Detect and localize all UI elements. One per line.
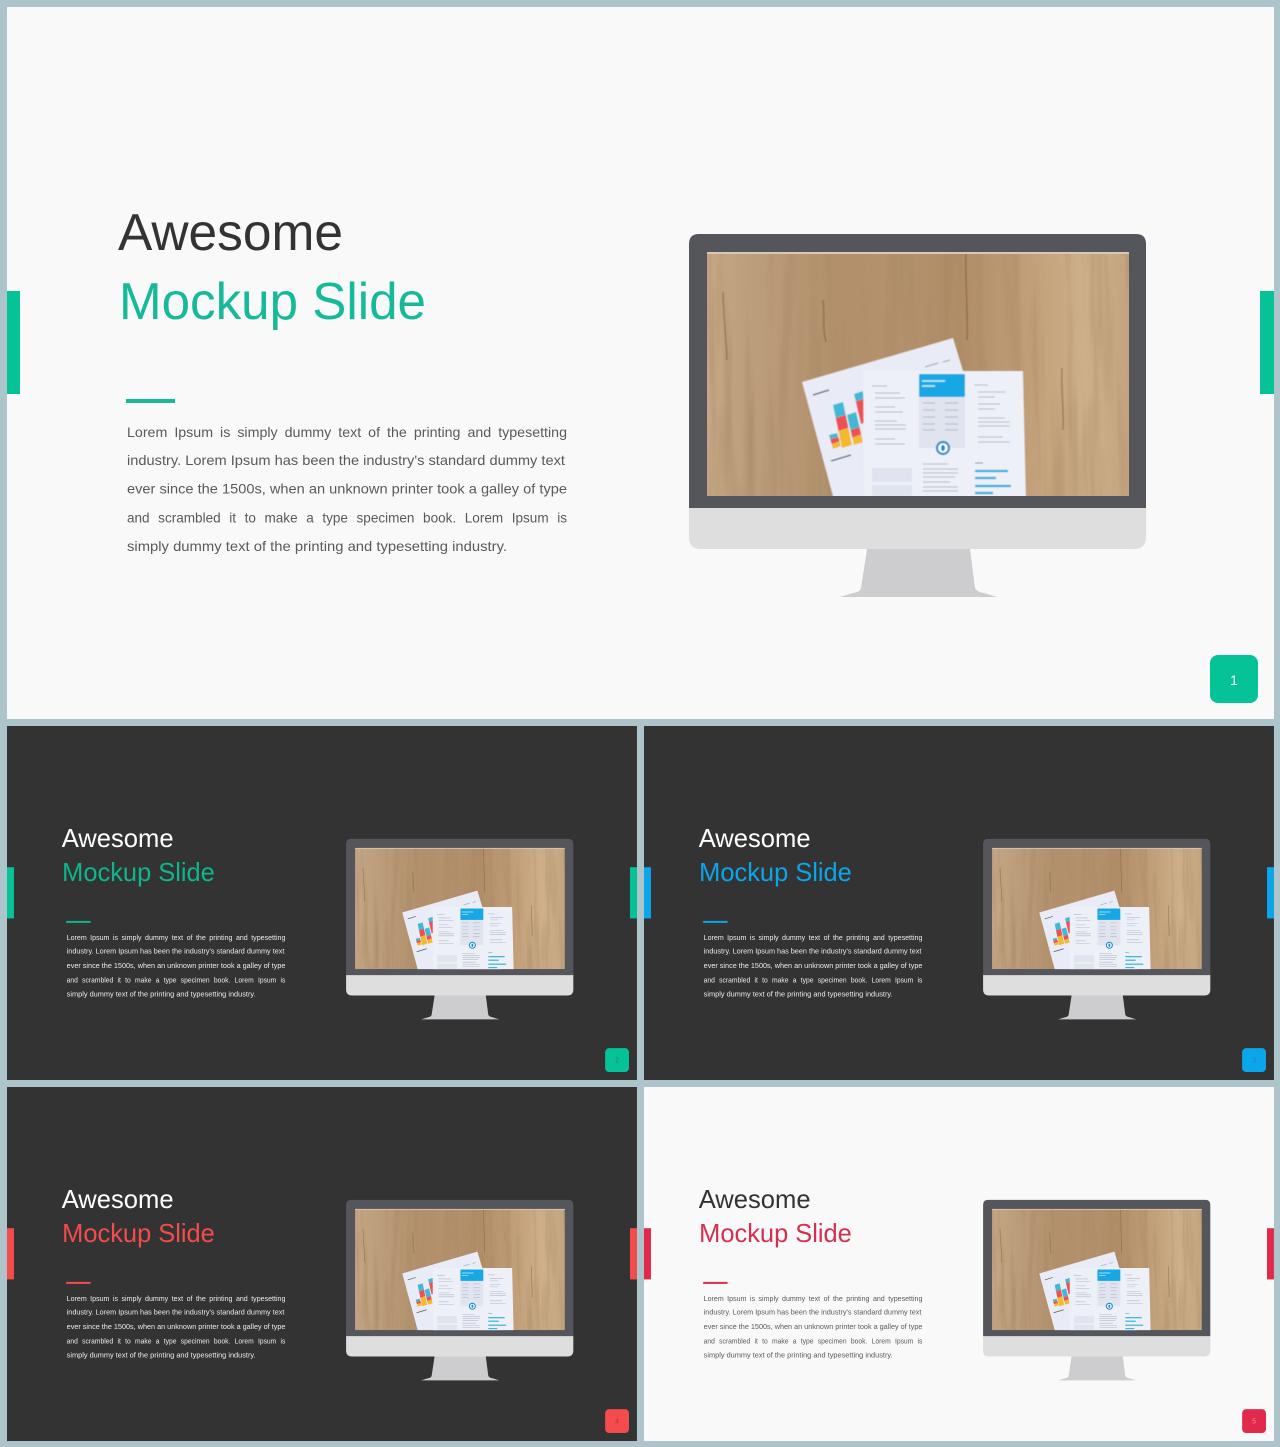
accent divider: [66, 1282, 91, 1284]
heading: [699, 1186, 852, 1248]
body text: industry. Lorem Ipsum has been the industry's standard dummy text: [67, 949, 284, 956]
body text: industry. Lorem Ipsum has been the industry's standard dummy text: [67, 1310, 284, 1317]
body text: Lorem Ipsum is simply dummy text of the printing and typesetting: [704, 935, 923, 942]
blue header block: [919, 374, 965, 397]
page number badge: [1242, 1048, 1266, 1072]
accent divider: [126, 399, 175, 403]
heading: [62, 1186, 215, 1248]
left accent tab: [644, 1228, 651, 1279]
right accent tab: [630, 867, 637, 918]
body text: [67, 1296, 286, 1359]
page number badge: 5: [1252, 1419, 1256, 1426]
body text: ever since the 1500s, when an unknown printer took a galley of type: [704, 963, 923, 970]
monitor mockup: [983, 1200, 1210, 1380]
heading: [699, 825, 852, 887]
panel: main light slide: [7, 7, 1274, 719]
body text: simply dummy text of the printing and typesetting industry.: [67, 991, 256, 998]
body text: [67, 935, 286, 998]
monitor stand: [840, 549, 997, 597]
body text: industry. Lorem Ipsum has been the industry's standard dummy text: [704, 1310, 921, 1317]
panel: dark slide red: [7, 1087, 637, 1441]
panel: dark slide blue: [644, 726, 1274, 1080]
heading: Mockup Slide: [699, 859, 852, 887]
right accent tab: [1260, 291, 1274, 394]
page number badge: 4: [615, 1419, 619, 1426]
panel: light slide crimson: [644, 1087, 1274, 1441]
page number badge: [605, 1409, 629, 1433]
body text: [704, 1296, 923, 1359]
slide background: [644, 1087, 1274, 1441]
body text: ever since the 1500s, when an unknown printer took a galley of type: [704, 1324, 923, 1331]
monitor mockup: [346, 839, 573, 1019]
monitor bezel: [689, 234, 1146, 508]
page number badge: 3: [1252, 1058, 1256, 1065]
heading: Mockup Slide: [699, 1220, 852, 1248]
monitor chin: [689, 506, 1146, 549]
page number badge: [1210, 655, 1258, 703]
slide background: [7, 726, 637, 1080]
monitor mockup: [689, 234, 1146, 597]
right accent tab: [630, 1228, 637, 1279]
body text: and scrambled it to make a type specimen book. Lorem Ipsum is: [67, 1338, 286, 1345]
round icon: [937, 442, 949, 454]
back paper with chart: [802, 338, 1000, 500]
body text: simply dummy text of the printing and typesetting industry.: [67, 1352, 256, 1359]
body text: and scrambled it to make a type specimen book. Lorem Ipsum is: [704, 1338, 923, 1345]
body text: ever since the 1500s, when an unknown printer took a galley of type: [127, 480, 567, 496]
heading: Mockup Slide: [119, 273, 426, 331]
right accent tab: [1267, 867, 1274, 918]
slide background: [644, 726, 1274, 1080]
left accent tab: [644, 867, 651, 918]
heading: Awesome: [699, 825, 811, 853]
body text: [704, 935, 923, 998]
heading: Mockup Slide: [62, 1220, 215, 1248]
skill bars: [975, 471, 1011, 493]
wood screen photo: [707, 252, 1129, 500]
body text: Lorem Ipsum is simply dummy text of the printing and typesetting: [67, 1296, 286, 1303]
heading: Awesome: [699, 1186, 811, 1214]
left accent tab: [7, 1228, 14, 1279]
body text: Lorem Ipsum is simply dummy text of the printing and typesetting: [67, 935, 286, 942]
monitor mockup: [983, 839, 1210, 1019]
body text: and scrambled it to make a type specimen book. Lorem Ipsum is: [704, 977, 923, 984]
accent divider: [66, 921, 91, 923]
heading: [118, 204, 426, 331]
body text: [127, 424, 567, 554]
body text: ever since the 1500s, when an unknown printer took a galley of type: [67, 963, 286, 970]
heading: Awesome: [62, 1186, 174, 1214]
accent divider: [703, 1282, 728, 1284]
body text: simply dummy text of the printing and typesetting industry.: [127, 538, 507, 554]
page number badge: [605, 1048, 629, 1072]
slide background: [7, 1087, 637, 1441]
body text: ever since the 1500s, when an unknown printer took a galley of type: [67, 1324, 286, 1331]
page number badge: 1: [1230, 672, 1238, 688]
body text: Lorem Ipsum is simply dummy text of the printing and typesetting: [704, 1296, 923, 1303]
body text: simply dummy text of the printing and typesetting industry.: [704, 1352, 893, 1359]
body text: and scrambled it to make a type specimen book. Lorem Ipsum is: [67, 977, 286, 984]
slide background: [7, 7, 1274, 719]
heading: [62, 825, 215, 887]
body text: and scrambled it to make a type specimen book. Lorem Ipsum is: [127, 510, 567, 526]
body text: industry. Lorem Ipsum has been the industry's standard dummy text: [127, 452, 565, 468]
body text: industry. Lorem Ipsum has been the industry's standard dummy text: [704, 949, 921, 956]
left accent tab: [7, 867, 14, 918]
monitor mockup: [346, 1200, 573, 1380]
body text: simply dummy text of the printing and typesetting industry.: [704, 991, 893, 998]
heading: Awesome: [118, 204, 343, 262]
page number badge: 2: [615, 1058, 619, 1065]
heading: Awesome: [62, 825, 174, 853]
front paper resume: [863, 371, 1026, 500]
right accent tab: [1267, 1228, 1274, 1279]
heading: Mockup Slide: [62, 859, 215, 887]
panel: dark slide green: [7, 726, 637, 1080]
accent divider: [703, 921, 728, 923]
page number badge: [1242, 1409, 1266, 1433]
left accent tab: [7, 291, 20, 394]
body text: Lorem Ipsum is simply dummy text of the printing and typesetting: [127, 424, 567, 440]
